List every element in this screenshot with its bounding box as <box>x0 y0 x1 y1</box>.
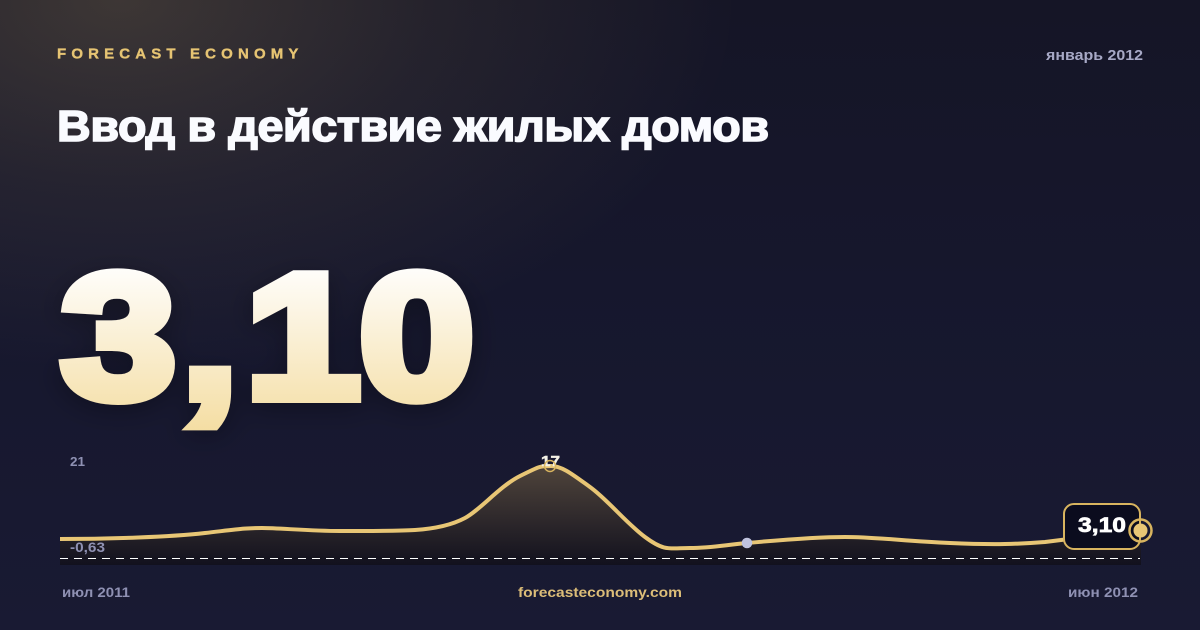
big value: 3,10 <box>61 238 474 435</box>
zero dashed line <box>60 558 1140 560</box>
start date label: июл 2011 <box>62 584 130 600</box>
peak value label: 17 <box>541 453 560 470</box>
axis min label: -0,63 <box>70 540 106 555</box>
date label: январь 2012 <box>1046 48 1143 64</box>
chart area fill <box>60 466 1141 565</box>
title: Ввод в действие жилых домов <box>57 101 769 151</box>
axis max label: 21 <box>70 454 85 469</box>
current value badge <box>1064 504 1140 549</box>
chart line <box>60 466 1141 548</box>
peak marker <box>544 460 556 472</box>
end date label: июн 2012 <box>1068 584 1138 600</box>
sparkline chart <box>60 453 1152 565</box>
mid marker <box>742 538 752 548</box>
current point marker <box>1130 520 1152 542</box>
site label: forecasteconomy.com <box>518 584 682 600</box>
brand label: FORECAST ECONOMY <box>57 46 304 62</box>
current value badge: 3,10 <box>1078 514 1126 537</box>
